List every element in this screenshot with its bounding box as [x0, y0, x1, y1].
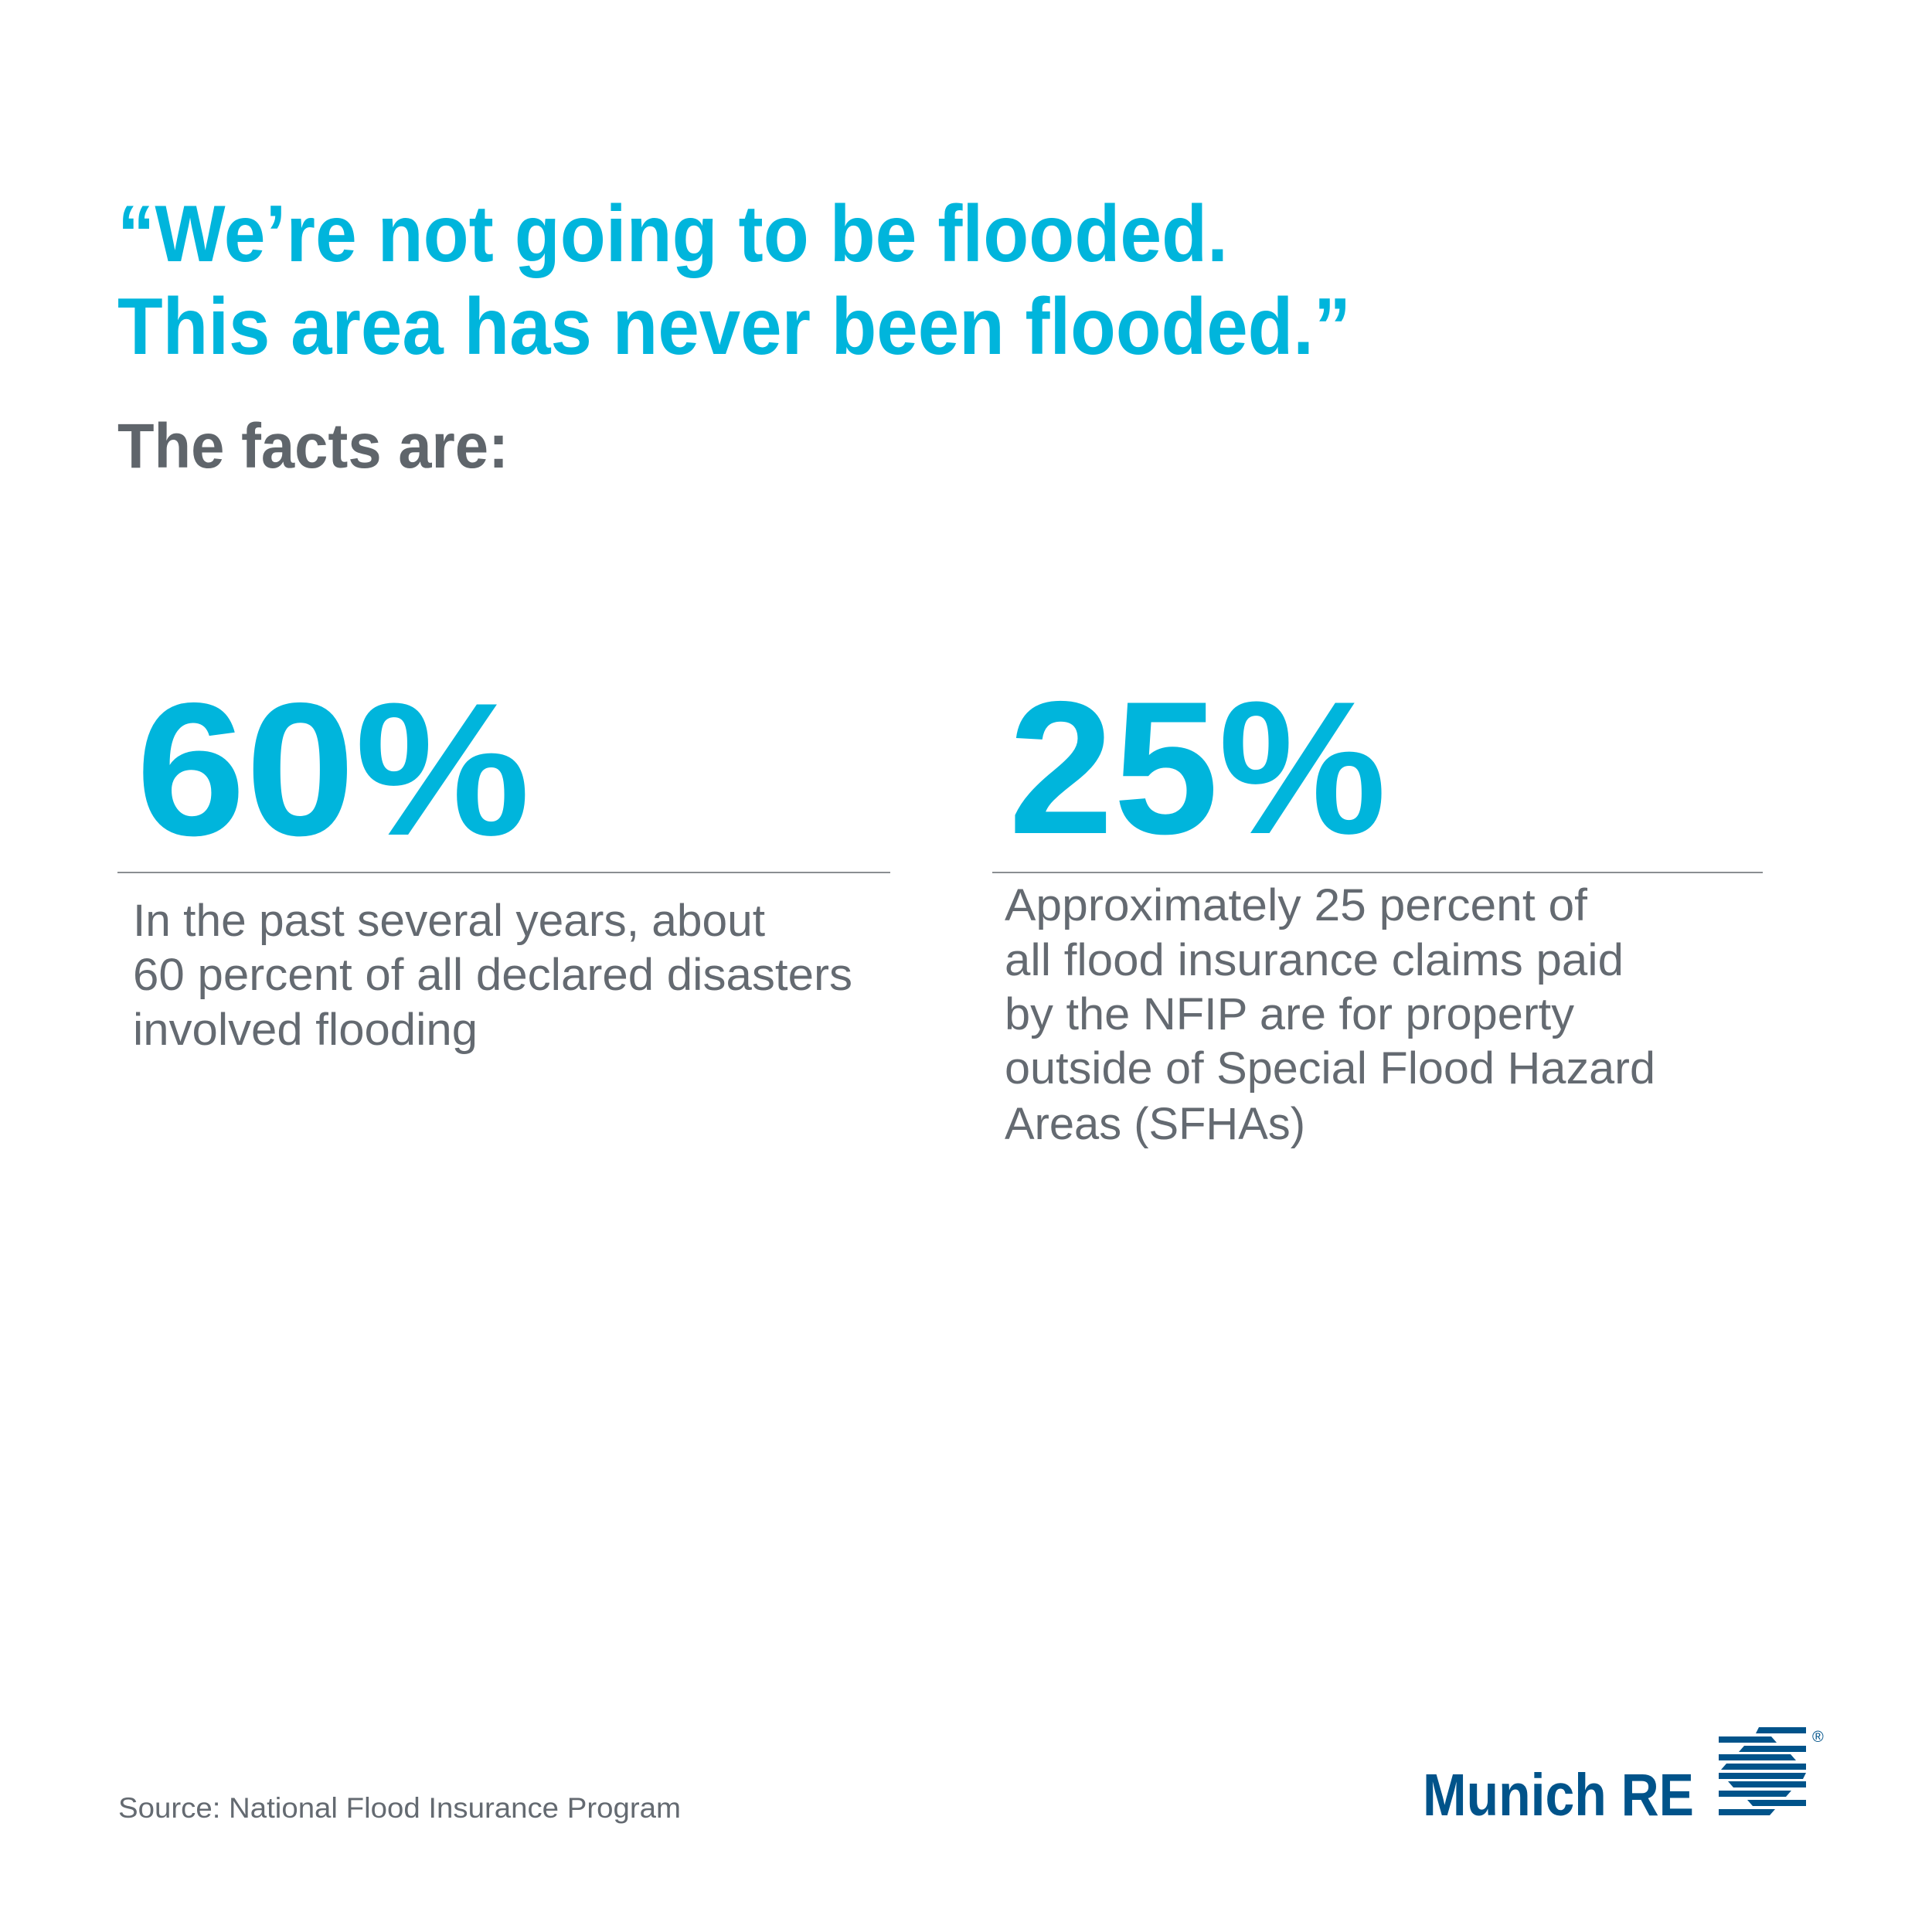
title: “We’re not going to be flooded.: [117, 189, 1228, 279]
logo icon: stripes: [1719, 1727, 1806, 1815]
panel: 60%: [117, 663, 890, 1055]
logo registered mark: ®: [1812, 1729, 1824, 1746]
source: Source: National Flood Insurance Program: [118, 1792, 681, 1824]
text: 25% description: Approximately 25 percent of: [1005, 880, 1588, 930]
logo: Munich RE: [1423, 1727, 1824, 1828]
subheading: The facts are:: [117, 411, 509, 481]
stat: 60%: 60%: [136, 663, 530, 875]
logo wordmark: Munich RE: [1423, 1762, 1694, 1828]
text: 25% description: by the NFIP are for property: [1005, 989, 1574, 1039]
text: 60% description: In the past several years, about: [133, 896, 765, 946]
text: 25% description: Areas (SFHAs): [1005, 1099, 1305, 1149]
text: 60% description: involved flooding: [133, 1005, 478, 1055]
text: 60% description: [133, 896, 852, 1055]
panel: 25%: [992, 662, 1763, 1149]
stat: 25%: 25%: [1009, 662, 1386, 873]
text: 25% description: outside of Special Flood Hazard: [1005, 1043, 1655, 1094]
title: [117, 189, 1351, 372]
title: This area has never been flooded.”: [117, 282, 1351, 372]
text: 25% description: [1005, 880, 1655, 1149]
text: 25% description: all flood insurance claims paid: [1005, 935, 1624, 985]
text: 60% description: 60 percent of all declared disasters: [133, 950, 852, 1000]
